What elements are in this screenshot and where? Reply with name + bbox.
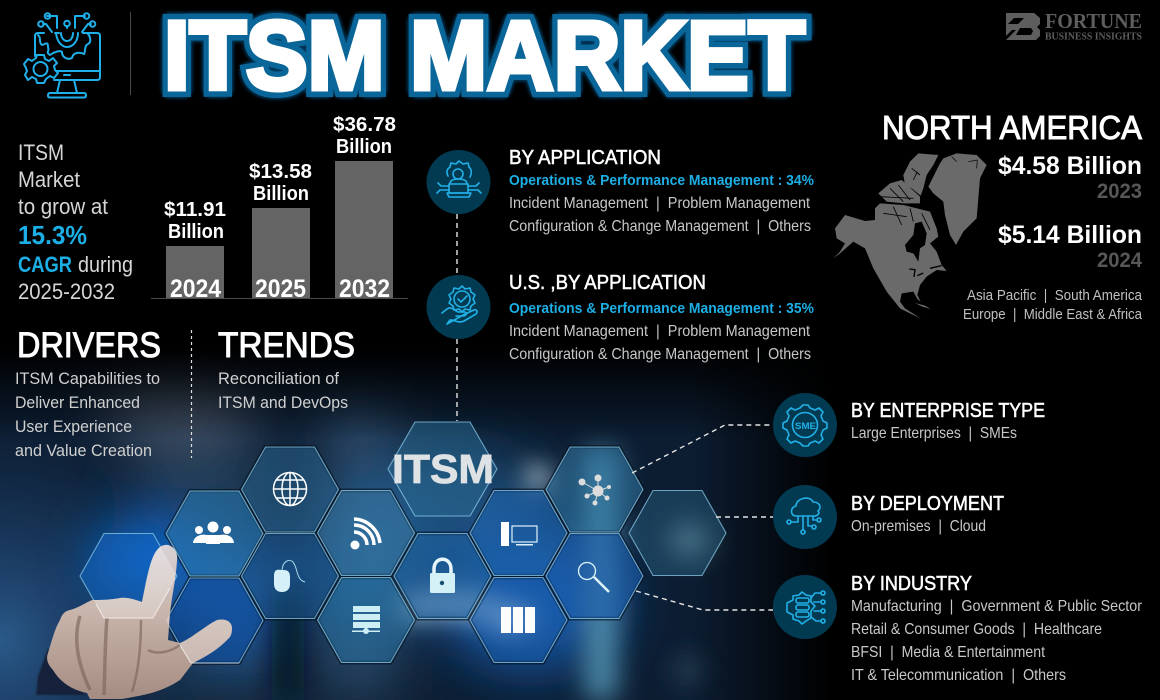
- logo: Fortune Business Insights: BUSINESS INSIGHTS: [1045, 32, 1142, 42]
- bar: 2024: Billion: [168, 221, 224, 243]
- Greenland fjords: [952, 157, 977, 168]
- background photo: businessman and blurred blue lights: [0, 240, 830, 700]
- text block: market growth: to grow at: [18, 194, 108, 219]
- panel: by deployment: [851, 493, 1004, 535]
- panel: by application: Configuration & Change Management | Others: [509, 218, 811, 235]
- icon: wifi: [350, 519, 380, 550]
- panel: by application: BY APPLICATION: [509, 147, 661, 169]
- hexagon: thumb: [166, 578, 263, 663]
- hexagon: ITSM: [388, 422, 497, 516]
- panel: by industry: [851, 573, 1143, 684]
- hexagon gaps shadow: [166, 447, 643, 663]
- icon: industry circuit server: [773, 575, 837, 639]
- panel: by industry: Retail & Consumer Goods | Healthcare: [851, 621, 1102, 638]
- text block: market growth: CAGR: [18, 252, 72, 277]
- panel: drivers: DRIVERS: [17, 326, 161, 365]
- panel: by industry: BY INDUSTRY: [851, 573, 972, 595]
- hand shape: [47, 545, 232, 699]
- bar: 2025: Billion: [253, 183, 309, 205]
- icon: server rack: [352, 606, 380, 634]
- panel: trends: TRENDS: [218, 326, 355, 365]
- hexagon: mouse: [242, 534, 338, 618]
- panel: trends: ITSM and DevOps: [218, 393, 348, 412]
- hexagon: lock: [394, 534, 491, 618]
- bar: 2024: 2024: [170, 275, 221, 303]
- Hudson Bay and inland water: [905, 222, 927, 262]
- panel: by application: [509, 147, 814, 235]
- hexagon: network nodes: [546, 447, 643, 532]
- map: North America: [833, 153, 987, 318]
- bar: 2032: Billion: [336, 136, 392, 158]
- icon: computer mouse: [274, 561, 305, 592]
- panel: North America: 2024: [1097, 249, 1142, 272]
- title: ITSM MARKET: [164, 1, 805, 110]
- title: ITSM MARKET: [164, 1, 805, 110]
- divider: header: [130, 12, 131, 95]
- hexagon: storage: [470, 578, 567, 662]
- hexagon: globe: [242, 447, 338, 532]
- Greenland: [928, 153, 987, 245]
- panel: drivers: Deliver Enhanced: [15, 393, 140, 412]
- panel: North America: NORTH AMERICA: [882, 109, 1142, 146]
- divider: drivers and trends: [190, 330, 192, 458]
- bar: 2032: $36.78: [333, 114, 396, 136]
- logo: Fortune Business Insights: FORTUNE: [1045, 9, 1142, 33]
- sleeve cuff: [36, 648, 86, 695]
- text block: market growth: during: [78, 252, 133, 277]
- panel: North America: Asia Pacific | South America: [967, 287, 1143, 304]
- panel: by industry: IT & Telecommunication | Others: [851, 667, 1066, 684]
- Great Lakes and St. Lawrence: [909, 266, 942, 277]
- finger overlay hexagon edge: [96, 588, 239, 663]
- panel: North America: [882, 109, 1143, 323]
- panel: drivers: ITSM Capabilities to: [15, 369, 160, 388]
- finger creases: [77, 616, 180, 695]
- panel: drivers: User Experience: [15, 417, 132, 436]
- Arctic islands: [878, 180, 920, 203]
- icon: U.S. hand with gear: [426, 275, 490, 339]
- hexagon network: [80, 422, 726, 663]
- hexagon tint over fingers: [94, 547, 232, 663]
- panel: U.S. by application: [509, 272, 814, 363]
- icon: people: [193, 522, 234, 544]
- mainland: [833, 203, 947, 318]
- text block: market growth: ITSM: [18, 140, 64, 165]
- panel: drivers: and Value Creation: [15, 441, 152, 460]
- panel: North America: $5.14 Billion: [998, 221, 1142, 249]
- bar chart: market size: [151, 114, 408, 303]
- Arctic channels: [880, 168, 930, 230]
- panel: drivers: [15, 326, 161, 460]
- bar: 2032: 2032: [339, 275, 390, 303]
- bar: 2024: [164, 199, 226, 303]
- text block: market growth: 15.3%: [18, 220, 87, 250]
- bar: 2025: 2025: [255, 275, 306, 303]
- hand pointing: [36, 544, 232, 699]
- panel: by industry: BFSI | Media & Entertainment: [851, 644, 1045, 661]
- Ellesmere Island: [903, 153, 938, 196]
- icon: server towers: [501, 607, 535, 633]
- hexagon: wifi: [318, 490, 414, 576]
- label: ITSM in hexagon: ITSM: [392, 446, 494, 492]
- hexagon: monitor: [470, 490, 567, 576]
- panel: by enterprise type: Large Enterprises | SMEs: [851, 425, 1017, 442]
- panel: trends: [218, 326, 355, 412]
- panel: trends: Reconciliation of: [218, 369, 339, 388]
- bar: 2025: [249, 161, 312, 303]
- bar: 2024: $11.91: [164, 199, 226, 221]
- hexagon: server: [318, 578, 414, 662]
- icon: magnifier: [578, 562, 609, 592]
- title: ITSM MARKET: [164, 1, 805, 110]
- Cuba: [915, 303, 931, 309]
- dashed connector: deployment: [716, 516, 773, 518]
- panel: by enterprise type: BY ENTERPRISE TYPE: [851, 400, 1045, 422]
- panel: by application: Incident Management | Problem Management: [509, 195, 810, 212]
- hexagon: people: [166, 491, 263, 576]
- icon: monitor with gear: [24, 13, 100, 98]
- icon: application gear with user: [426, 150, 490, 214]
- dashed connector: enterprise type: [632, 425, 773, 473]
- panel: by enterprise type: [851, 400, 1045, 442]
- hexagon icons: [193, 472, 611, 634]
- panel: U.S. by application: Configuration & Change Management | Others: [509, 346, 811, 363]
- icon: desktop computer: [501, 522, 537, 546]
- icon: globe: [274, 472, 306, 506]
- icon: enterprise gear SME: [773, 393, 837, 457]
- panel: U.S. by application: U.S. ,BY APPLICATION: [509, 272, 706, 294]
- panel: by deployment: BY DEPLOYMENT: [851, 493, 1004, 515]
- dashed connector: application: [456, 214, 458, 421]
- icon: padlock: [430, 559, 455, 593]
- panel: by deployment: On-premises | Cloud: [851, 518, 986, 535]
- panel: U.S. by application: Incident Management | Problem Management: [509, 323, 810, 340]
- text block: market growth: Market: [18, 167, 80, 192]
- bar: 2025: $13.58: [249, 161, 312, 183]
- text block: market growth: [18, 140, 133, 304]
- logo: Fortune Business Insights: [1006, 9, 1142, 42]
- hexagon: empty: [629, 490, 726, 576]
- panel: North America: 2023: [1097, 180, 1142, 203]
- dashed connector: industry: [636, 591, 773, 610]
- icon: enterprise gear SME: SME: [795, 421, 816, 432]
- icon: network nodes: [578, 474, 611, 506]
- panel: North America: $4.58 Billion: [998, 152, 1142, 180]
- hexagon: search: [546, 534, 643, 618]
- panel: by application: Operations & Performance Management : 34%: [509, 172, 814, 189]
- bar: 2032: [333, 114, 396, 303]
- text block: market growth: 2025-2032: [18, 279, 115, 304]
- icon: cloud deployment: [773, 485, 837, 549]
- panel: U.S. by application: Operations & Performance Management : 35%: [509, 300, 814, 317]
- hexagon: finger target: [80, 534, 177, 618]
